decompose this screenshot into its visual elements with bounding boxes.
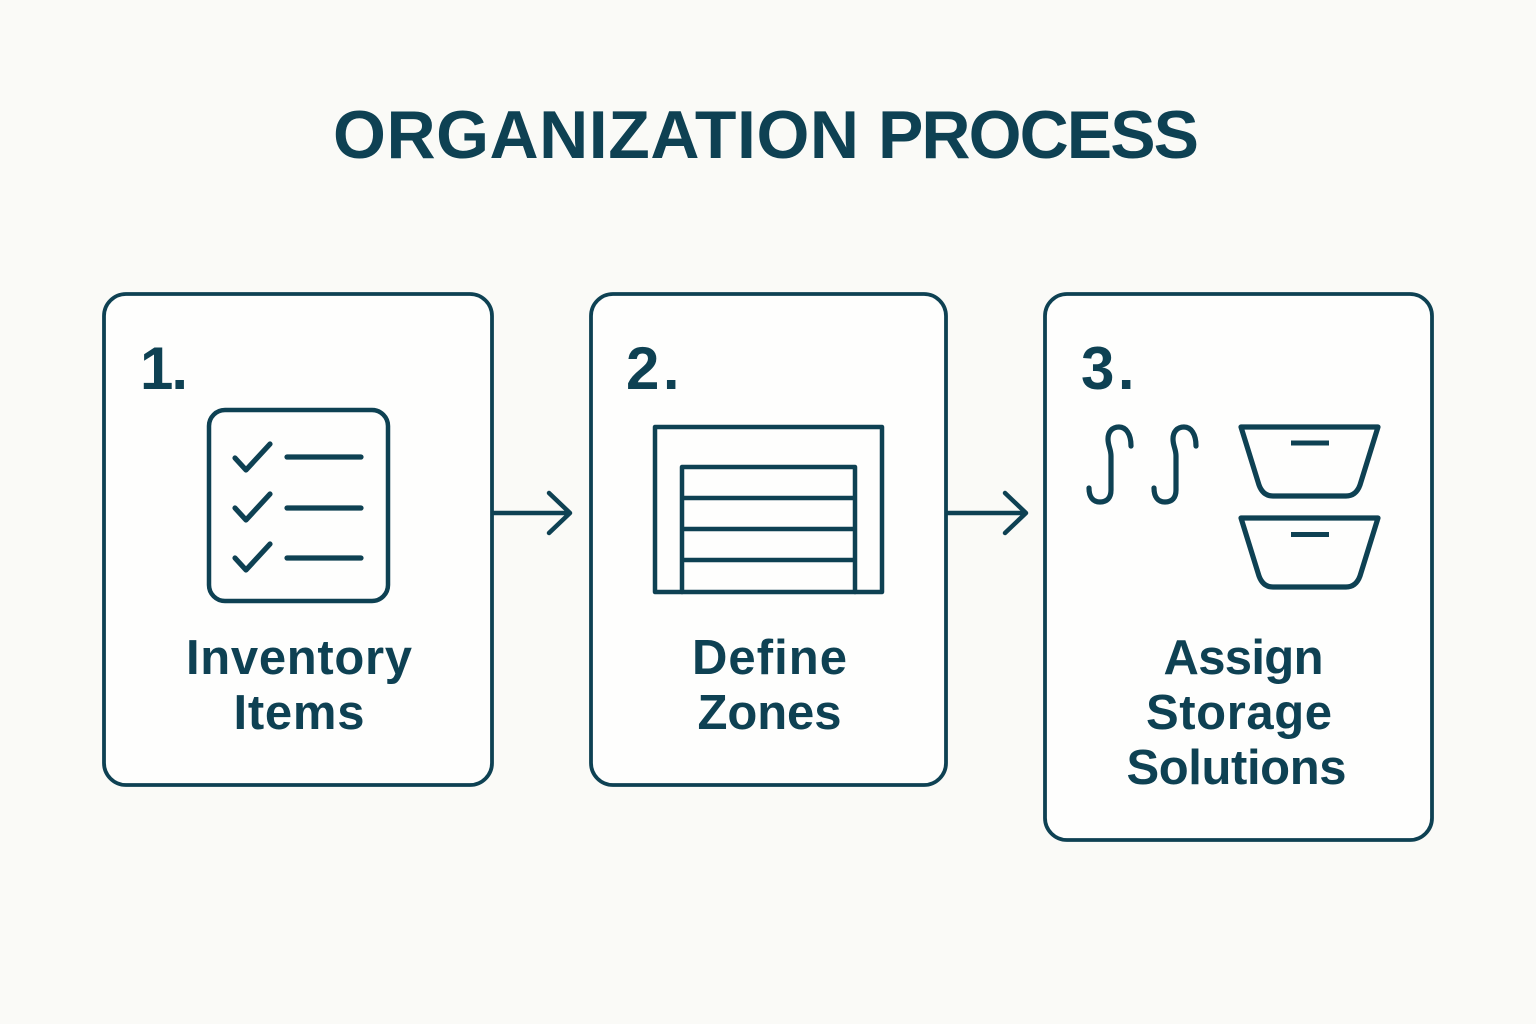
step number 1: 1. <box>140 335 186 402</box>
step 3 label: Solutions <box>1126 741 1346 795</box>
icon: storage bins <box>1241 427 1378 587</box>
step 3 label: Assign <box>1164 631 1324 685</box>
arrow: step 1 to step 2 <box>494 493 570 533</box>
step 2 label: Define <box>692 631 847 685</box>
arrow: step 2 to step 3 <box>948 493 1026 533</box>
icon: garage door <box>655 427 882 592</box>
step 2 label: Zones <box>698 686 842 740</box>
title: ORGANIZATION <box>333 97 859 173</box>
step 3 label: Storage <box>1146 686 1332 740</box>
step 3 label <box>1126 631 1346 795</box>
step number 2: 2. <box>626 335 683 402</box>
icon: hooks <box>1089 427 1196 502</box>
step 2 label <box>692 631 847 740</box>
panel: step 3 assign storage solutions <box>1045 294 1432 840</box>
panel: step 2 define zones <box>591 294 946 785</box>
step 1 label: Items <box>234 686 364 740</box>
step number 3: 3. <box>1081 335 1138 402</box>
panel: step 1 inventory items <box>104 294 492 785</box>
icon: checklist <box>209 410 388 601</box>
step 1 label: Inventory <box>186 631 412 685</box>
title: PROCESS <box>878 97 1199 173</box>
step 1 label <box>186 631 412 740</box>
